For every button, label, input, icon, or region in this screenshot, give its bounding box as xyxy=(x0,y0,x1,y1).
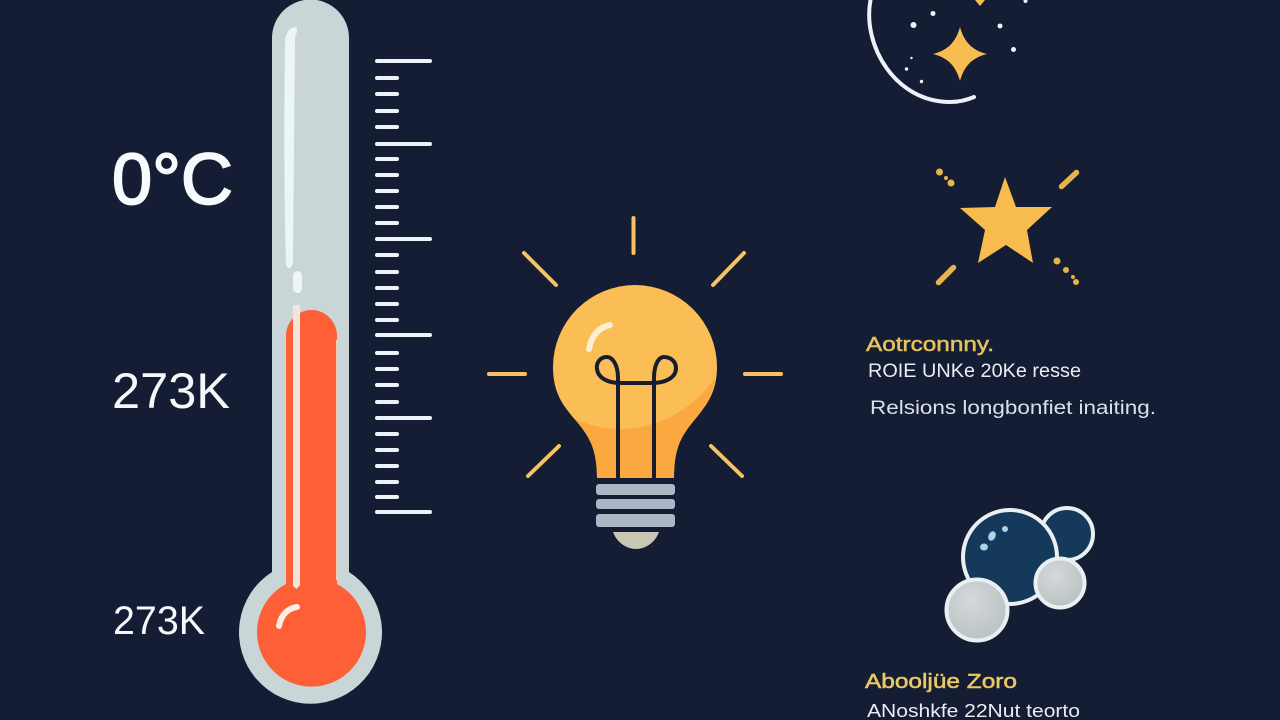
white star dots xyxy=(905,0,1028,83)
light rays xyxy=(489,218,781,476)
sparkle dashes xyxy=(938,172,1076,282)
five point star xyxy=(960,177,1052,263)
text block: astronomy xyxy=(866,334,1156,419)
astronomy line 2: Relsions longbonfiet inaiting. xyxy=(870,398,1156,419)
icon: star with sparkles xyxy=(936,168,1079,285)
astronomy heading: Aotrconnny. xyxy=(866,334,994,356)
label: 273K lower: 273K xyxy=(113,599,205,643)
thermometer glass xyxy=(239,0,382,704)
bulb shaded lower part xyxy=(575,378,715,478)
glass highlight xyxy=(284,27,297,268)
mercury edge light xyxy=(336,340,338,580)
screw base xyxy=(596,484,675,495)
mercury column and bulb xyxy=(257,310,366,687)
back atom xyxy=(1041,508,1093,560)
absolute zero heading: Abooljüe Zoro xyxy=(865,671,1017,693)
astronomy line 1: ROIE UNKe 20Ke resse xyxy=(868,361,1081,382)
large atom shine xyxy=(980,526,1008,550)
large atom xyxy=(963,510,1057,604)
label: 0°C: 0°C xyxy=(112,140,233,220)
label: 273K upper: 273K xyxy=(112,363,230,419)
text block: absolute zero xyxy=(865,671,1080,720)
partial star at top xyxy=(975,0,985,6)
filament xyxy=(597,357,676,478)
thermometer xyxy=(239,0,382,704)
sparkle dots xyxy=(936,168,1079,285)
icon: molecule xyxy=(946,508,1093,640)
light bulb xyxy=(489,218,781,549)
bulb tip xyxy=(613,532,659,549)
crescent arc xyxy=(869,0,974,102)
glass highlight dot xyxy=(293,271,302,293)
icon: moon and stars xyxy=(869,0,1028,102)
bulb glass xyxy=(553,285,717,478)
lower left atom xyxy=(946,580,1008,640)
bulb shine xyxy=(589,325,610,349)
bulb shine xyxy=(279,607,297,626)
four point star xyxy=(933,27,987,81)
temperature scale ticks xyxy=(375,59,432,514)
right atom xyxy=(1036,558,1084,608)
mercury highlight xyxy=(293,305,300,589)
